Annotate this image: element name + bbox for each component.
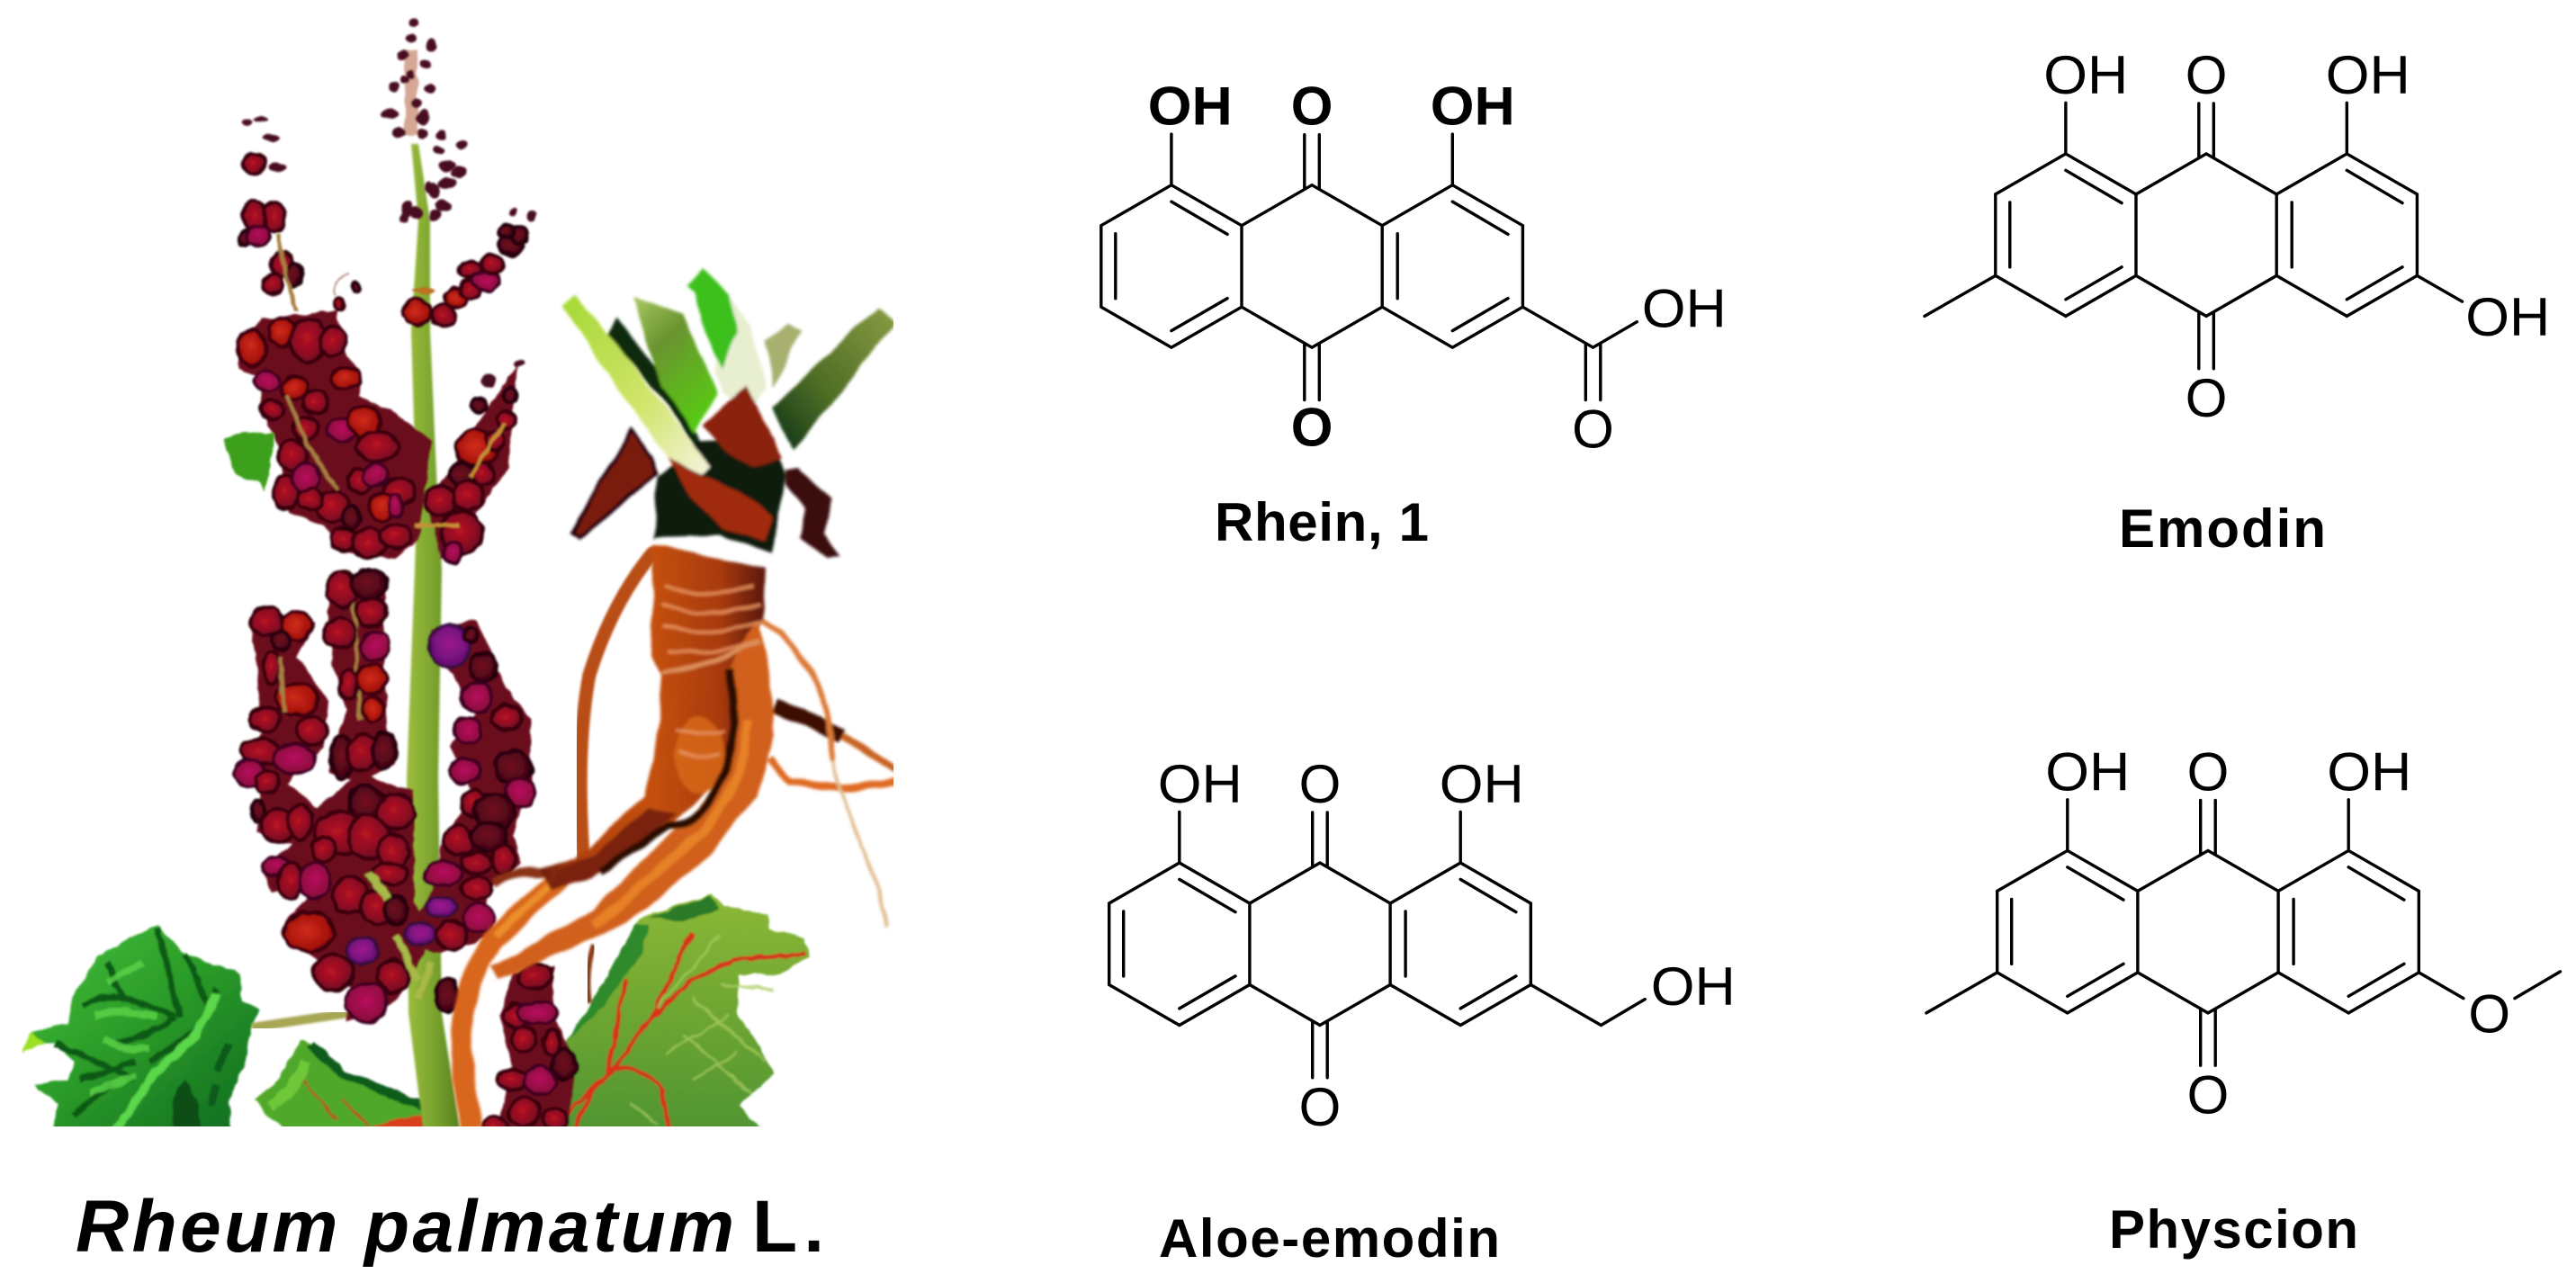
atom labels — [2045, 741, 2510, 1125]
lower left raceme flowers — [251, 607, 283, 636]
bottom raceme flowers — [519, 964, 552, 989]
methyl and methoxy bonds — [1926, 972, 2561, 1013]
root body — [540, 545, 766, 891]
right leaf — [564, 893, 812, 1126]
root dark arm — [551, 808, 677, 891]
caption: Rheum palmatum L.: Rheum palmatum — [76, 1186, 734, 1268]
atom labels: O — [1299, 1077, 1341, 1137]
atom labels: OH — [2465, 287, 2550, 347]
caption: Rheum palmatum L.: L. — [752, 1186, 824, 1268]
anthraquinone skeleton — [1109, 812, 1530, 1078]
dark right rootlet — [774, 706, 842, 735]
structure: Emodin — [1925, 45, 2550, 428]
atom labels: OH — [2045, 741, 2130, 802]
name: Emodin: Emodin — [2119, 498, 2326, 559]
flower junction with green stalks — [369, 873, 432, 999]
atom labels — [1148, 76, 1727, 460]
top spike flowers — [405, 49, 417, 135]
name: Aloe-emodin: Aloe-emodin — [1159, 1208, 1500, 1269]
atom labels: O — [1291, 76, 1333, 137]
name: Physcion: Physcion — [2109, 1199, 2358, 1260]
atom labels: OH — [2327, 741, 2411, 802]
hydroxymethyl bonds — [1530, 984, 1645, 1026]
atom labels: OH — [2326, 45, 2410, 105]
atom labels — [2043, 45, 2550, 428]
thin right rootlet — [762, 620, 832, 760]
atom labels: O — [2187, 1064, 2229, 1125]
atom labels: O — [2186, 368, 2227, 428]
atom labels: O — [1299, 754, 1341, 814]
second spike flowers — [435, 131, 446, 140]
atom labels: O — [2187, 741, 2229, 802]
atom labels: OH — [1440, 754, 1524, 814]
lower middle raceme flowers — [327, 571, 357, 607]
atom labels: OH — [1642, 279, 1727, 339]
lower right raceme flowers — [429, 624, 471, 668]
atom labels: OH — [1651, 956, 1736, 1017]
tying rootlet across body — [662, 641, 759, 672]
down-curving orange root — [461, 877, 562, 1130]
atom labels: O — [1291, 398, 1333, 458]
name: Rhein, 1: Rhein, 1 — [1215, 492, 1429, 552]
atom labels: OH — [1148, 76, 1233, 137]
crown: blades and folded sheaths — [562, 268, 895, 560]
flower clusters — [234, 17, 576, 1135]
structure: Physcion — [1926, 741, 2561, 1125]
atom labels — [1158, 754, 1736, 1137]
structure: Aloe-emodin — [1109, 754, 1736, 1137]
root dark groove — [601, 668, 734, 871]
atom labels: O — [2186, 45, 2227, 105]
atom labels: OH — [2043, 45, 2128, 105]
root streaks — [661, 585, 763, 757]
root assembly — [461, 545, 900, 1130]
left leaf — [21, 924, 258, 1134]
atom labels: O — [2468, 983, 2510, 1044]
upper right branch flowers — [403, 299, 430, 326]
atom labels: OH — [1431, 76, 1515, 137]
lower right rootlet — [770, 758, 900, 789]
atom labels: OH — [1158, 754, 1243, 814]
atom labels: O — [1572, 399, 1614, 460]
leaf stalk — [252, 1013, 348, 1027]
anthraquinone skeleton — [1996, 103, 2417, 369]
carboxylic acid group bonds — [1522, 307, 1637, 399]
root side rootlet — [580, 553, 652, 855]
anthraquinone skeleton — [1997, 800, 2419, 1065]
small dark rootlet — [588, 945, 594, 1003]
middle leaf — [253, 1041, 424, 1134]
plant illustration: Rheum palmatum — [21, 17, 900, 1135]
right branch flowers — [513, 360, 525, 367]
thin upper arm tip — [493, 873, 562, 884]
root lower bright lobe — [675, 718, 725, 794]
anthraquinone skeleton — [1101, 134, 1522, 399]
upper left branch flowers — [242, 118, 253, 125]
small green leaf behind flowers — [222, 432, 274, 492]
large left cluster flowers — [238, 329, 266, 365]
cluster underlays — [236, 310, 576, 1130]
methyl and hydroxyl bonds — [1925, 275, 2462, 316]
outer orange band — [490, 620, 775, 980]
structure: Rhein — [1101, 76, 1727, 460]
main stem — [407, 144, 461, 1134]
